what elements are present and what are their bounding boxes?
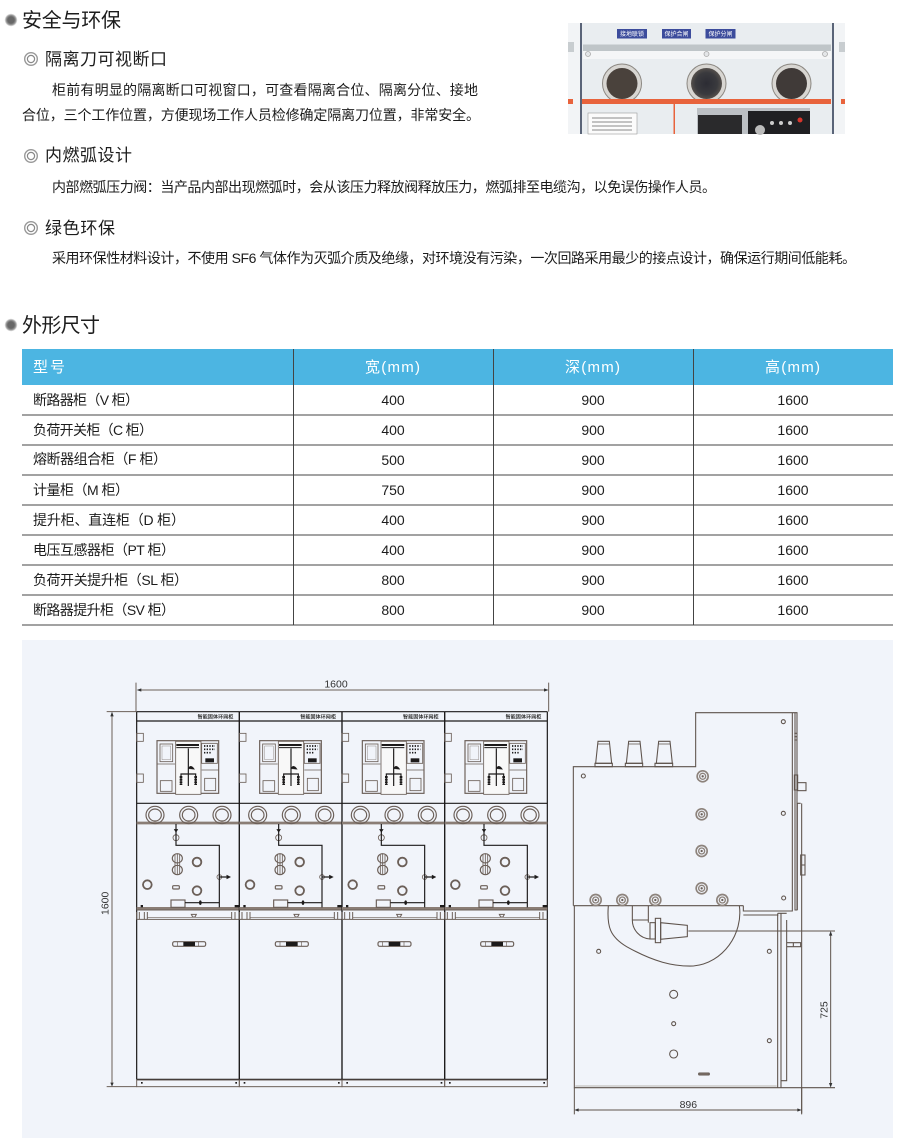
row: F cabinet: 熔断器组合柜（F 柜） <box>33 451 167 467</box>
small holes <box>581 720 786 1075</box>
subsection: internal arc design <box>25 146 716 195</box>
row: SV cabinet: 800 <box>381 602 405 618</box>
row: PT cabinet: 900 <box>581 542 605 558</box>
row: V cabinet <box>33 392 809 408</box>
front hardware <box>794 733 806 875</box>
row: SL cabinet: 负荷开关提升柜（SL 柜） <box>33 572 188 588</box>
text block <box>22 82 480 123</box>
row: D cabinet: 提升柜、直连柜（D 柜） <box>33 512 185 528</box>
cabinet 4 <box>445 712 547 1087</box>
dimension: depth 896: 896 <box>680 1100 697 1111</box>
panel: dimension drawings <box>22 640 893 1138</box>
row: SV cabinet: 900 <box>581 602 605 618</box>
row: SV cabinet: 断路器提升柜（SV 柜） <box>33 602 175 618</box>
row: PT cabinet: 电压互感器柜（PT 柜） <box>33 542 175 558</box>
table: dimensions <box>22 349 893 625</box>
row: C cabinet: 负荷开关柜（C 柜） <box>33 422 153 438</box>
row: C cabinet <box>33 422 809 438</box>
photo: switchgear front panel: 接地联锁 <box>620 30 644 38</box>
row: SL cabinet: 900 <box>581 572 605 588</box>
heading: external dimensions: 外形尺寸 <box>22 314 100 337</box>
row: F cabinet: 1600 <box>777 452 809 468</box>
table header: 宽(mm) <box>365 359 420 376</box>
row: M cabinet: 计量柜（M 柜） <box>33 482 129 498</box>
photo: switchgear front panel: 保护合闸 <box>664 30 689 38</box>
row: F cabinet <box>33 451 809 468</box>
row: D cabinet: 900 <box>581 512 605 528</box>
row: C cabinet: 900 <box>581 422 605 438</box>
cabinet 3: 智能固体环网柜 <box>403 714 439 721</box>
photo: switchgear front panel: 保护分闸 <box>708 30 733 38</box>
row: D cabinet: 1600 <box>777 512 809 528</box>
row: PT cabinet: 400 <box>381 542 405 558</box>
text block: 合位，三个工作位置，方便现场工作人员检修确定隔离刀位置，非常安全。 <box>22 107 480 123</box>
row: F cabinet: 900 <box>581 452 605 468</box>
bolts <box>589 770 729 906</box>
table header: 高(mm) <box>765 359 820 376</box>
upper enclosure outline <box>573 713 802 1113</box>
cabinet 1: 智能固体环网柜 <box>198 714 233 721</box>
table header: 深(mm) <box>565 359 620 376</box>
bushings <box>595 741 673 767</box>
row: SL cabinet: 800 <box>381 572 405 588</box>
row: F cabinet: 500 <box>381 452 405 468</box>
table header: 号 <box>50 359 65 376</box>
heading: safety and environment: 安全与环保 <box>22 9 121 32</box>
row: SV cabinet <box>33 602 809 618</box>
dimension: height 725: 725 <box>819 1001 830 1019</box>
row: D cabinet: 400 <box>381 512 405 528</box>
cabinet 2 <box>239 712 342 1087</box>
row: D cabinet <box>33 512 809 528</box>
cabinet 3 <box>342 712 445 1087</box>
row: PT cabinet: 1600 <box>777 542 809 558</box>
dimension: height 725 <box>688 931 835 1088</box>
cabinet 2: 智能固体环网柜 <box>300 714 336 721</box>
text block: 柜前有明显的隔离断口可视窗口，可查看隔离合位、隔离分位、接地 <box>52 82 478 98</box>
lower enclosure outline <box>574 906 835 1088</box>
row: SL cabinet <box>33 572 809 588</box>
dimension: depth 896 <box>574 1088 802 1114</box>
subsection: green environment <box>25 219 856 266</box>
text block: 内部燃弧压力阀：当产品内部出现燃弧时，会从该压力释放阀释放压力，燃弧排至电缆沟，以免误伤操作人员。 <box>52 179 716 195</box>
row: V cabinet: 1600 <box>777 392 809 408</box>
row: V cabinet: 900 <box>581 392 605 408</box>
row: C cabinet: 1600 <box>777 422 809 438</box>
icon: sub bullet <box>25 150 37 162</box>
diagram: front elevation <box>101 679 549 1087</box>
dimension: width 1600 <box>136 679 549 712</box>
subsection: isolating knife visible break <box>22 50 480 123</box>
cabinet 4: 智能固体环网柜 <box>506 714 541 721</box>
dimension: height 1600 <box>101 712 137 1087</box>
row: SL cabinet: 1600 <box>777 572 809 588</box>
cabinet 1 <box>137 712 239 1087</box>
diagram: side elevation <box>573 713 835 1114</box>
icon: sub bullet <box>25 53 37 65</box>
row: V cabinet: 断路器柜（V 柜） <box>33 392 139 408</box>
photo: switchgear front panel <box>568 23 845 135</box>
icon: sub bullet <box>25 222 37 234</box>
table header: 型 <box>33 359 48 376</box>
dimension: height 1600: 1600 <box>101 892 112 915</box>
dimension: width 1600: 1600 <box>324 679 348 690</box>
row: V cabinet: 400 <box>381 392 405 408</box>
row: SV cabinet: 1600 <box>777 602 809 618</box>
row: M cabinet: 900 <box>581 482 605 498</box>
subheading: 绿色环保 <box>45 219 115 238</box>
row: C cabinet: 400 <box>381 422 405 438</box>
subheading: 内燃弧设计 <box>45 146 132 165</box>
table header <box>22 349 893 385</box>
row: PT cabinet <box>33 542 809 558</box>
text block: 采用环保性材料设计，不使用 SF6 气体作为灭弧介质及绝缘，对环境没有污染，一次回路采用最少的接点设计，确保运行期间低能耗。 <box>52 250 856 266</box>
row: M cabinet: 750 <box>381 482 405 498</box>
subheading: 隔离刀可视断口 <box>45 50 167 69</box>
row: M cabinet <box>33 482 809 498</box>
arc chamber and cable connector <box>608 906 740 966</box>
row: M cabinet: 1600 <box>777 482 809 498</box>
